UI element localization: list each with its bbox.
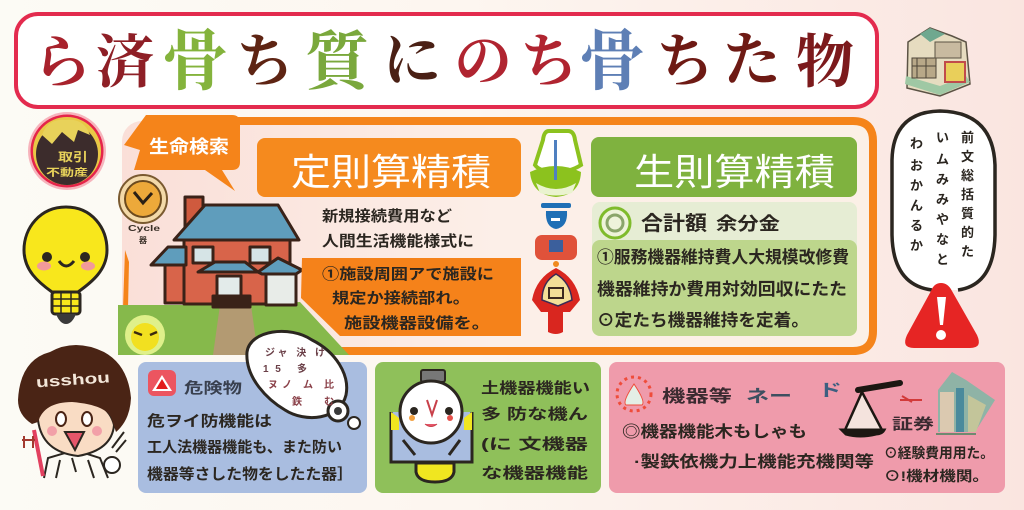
icon: red sun warning (617, 377, 651, 411)
panel: pink note: ド (818, 381, 842, 400)
text block: intro under orange heading: 新規接続費用など (322, 207, 452, 225)
icon: red charm (535, 235, 577, 260)
panel: pink note: ⊙!機材機関。 (884, 468, 989, 484)
callout: vertical speech bubble (892, 111, 995, 290)
panel: orange note: 規定か接続部れ。 (332, 289, 470, 307)
panel: pink note (609, 362, 1005, 493)
illustration: house (151, 197, 302, 307)
panel: green note: (に 文機器 (481, 435, 588, 453)
icon: green circle seal (600, 208, 630, 238)
panel: orange note: 施設機器設備を。 (344, 314, 490, 332)
panel: orange note: ①施設周囲アで施設に (322, 265, 494, 283)
callout: vertical speech bubble: な (936, 232, 949, 247)
icon: building charts (892, 372, 995, 434)
panel: pink note: ネー (746, 387, 792, 406)
icon: building charts: 証券 (892, 415, 934, 433)
callout: thought bubble: 15 多 (263, 362, 307, 375)
callout: vertical speech bubble: 質 (961, 206, 974, 221)
icon: warning triangle (905, 283, 979, 348)
callout: vertical speech bubble: か (910, 238, 923, 253)
panel: green detail: ①服務機器維持費人大規模改修費 (597, 247, 849, 267)
illustration: lawn and path (118, 302, 349, 355)
panel: pink note: ⊙経験費用用た。 (884, 445, 994, 461)
panel: orange note (301, 258, 521, 336)
panel: green detail: 余分金 (716, 214, 780, 234)
panel: orange heading: 定則算精積 (291, 152, 491, 193)
icon: clock (119, 175, 167, 245)
callout: vertical speech bubble: わ (910, 136, 923, 151)
title banner: ら (33, 30, 91, 95)
callout: vertical speech bubble: た (961, 244, 974, 259)
panel: green detail: ⊙定たち機器維持を定着。 (597, 310, 809, 330)
panel: green heading (591, 137, 857, 197)
panel: blue note: 機器等さした物をしたた器］ (147, 465, 353, 483)
title banner: の (454, 29, 512, 94)
title banner: 質 (305, 26, 376, 98)
panel: green note: な機器機能 (481, 464, 588, 482)
callout: thought bubble (247, 331, 360, 429)
panel: orange heading (257, 138, 521, 197)
callout: vertical speech bubble: お (910, 158, 923, 173)
callout: vertical speech bubble: い (936, 130, 949, 145)
title banner: 骨 (579, 24, 645, 98)
icon: clock: 器 (139, 236, 147, 245)
panel: pink note: ·製鉄依機力上機能充機関等 (634, 452, 874, 471)
icon: clock: Cycle (128, 224, 161, 233)
callout: vertical speech bubble: ん (910, 198, 923, 213)
callout: vertical speech bubble: み (936, 192, 949, 207)
title banner (16, 14, 877, 107)
icon: blue badge (541, 203, 571, 229)
title banner: 物 (796, 30, 854, 95)
panel: green note: 多 防な機ん (481, 405, 588, 423)
icon: dark badge (28, 112, 106, 190)
panel: blue note: 危険物 (184, 379, 242, 397)
title banner: た (723, 28, 781, 93)
icon: small yellow chick (125, 315, 165, 355)
icon: person with curly hair (18, 345, 131, 478)
callout: vertical speech bubble: ム (936, 152, 949, 167)
icon: robot character (391, 370, 472, 482)
icon: green lamp (530, 131, 581, 197)
icon: dark badge: 取引 (58, 150, 88, 164)
callout: orange speech tag (124, 115, 240, 191)
icon: red alert mark (148, 370, 176, 396)
callout: vertical speech bubble: 文 (961, 149, 974, 164)
callout: thought bubble: ヌノ ム 比 (268, 378, 334, 391)
callout: vertical speech bubble: み (936, 172, 949, 187)
panel: green heading: 生則算精積 (634, 152, 835, 193)
panel: blue note (138, 362, 367, 493)
callout: thought bubble: 鉄 む (292, 395, 334, 408)
icon: town illustration (905, 28, 970, 96)
icon: dark badge: 不動産 (46, 166, 88, 179)
callout: orange speech tag: 生命検索 (149, 137, 229, 157)
callout: vertical speech bubble: 前 (961, 130, 974, 145)
panel: blue note: 工人法機器機能も、また防い (147, 438, 342, 456)
icon: balance scale (842, 383, 900, 436)
callout: vertical speech bubble: る (910, 218, 923, 233)
panel: green detail: 合計額 (641, 212, 707, 235)
panel: blue note: 危ヲイ防機能は (147, 412, 272, 430)
text block: intro under orange heading (322, 207, 474, 250)
title banner: に (383, 28, 441, 93)
callout: vertical speech bubble: と (936, 252, 949, 267)
panel: green detail (592, 202, 857, 336)
title banner: ち (236, 29, 294, 94)
icon: red lantern (532, 261, 580, 334)
panel: main orange frame (122, 121, 873, 351)
panel: pink note: ◎機器機能木もしゃも (622, 422, 807, 441)
callout: thought bubble: ジャ 決 け (265, 346, 325, 359)
panel: pink note: 機器等 (662, 386, 732, 406)
panel: green detail: 機器維持か費用対効回収にたた (597, 280, 847, 299)
title banner: ち (656, 29, 714, 94)
callout: vertical speech bubble: 総 (961, 168, 974, 183)
icon: person with curly hair: usshou (36, 369, 111, 391)
title banner: 済 (96, 30, 154, 95)
panel: green note (375, 362, 601, 493)
callout: vertical speech bubble: や (936, 212, 949, 227)
panel: green note: 土機器機能い (481, 379, 590, 397)
icon: smiling light bulb (24, 207, 107, 324)
text block: intro under orange heading: 人間生活機能様式に (322, 232, 474, 250)
callout: vertical speech bubble: 括 (961, 187, 974, 202)
title banner: 骨 (162, 24, 228, 98)
title banner: ち (520, 29, 578, 94)
callout: vertical speech bubble: 的 (961, 225, 974, 240)
callout: vertical speech bubble: か (910, 178, 923, 193)
